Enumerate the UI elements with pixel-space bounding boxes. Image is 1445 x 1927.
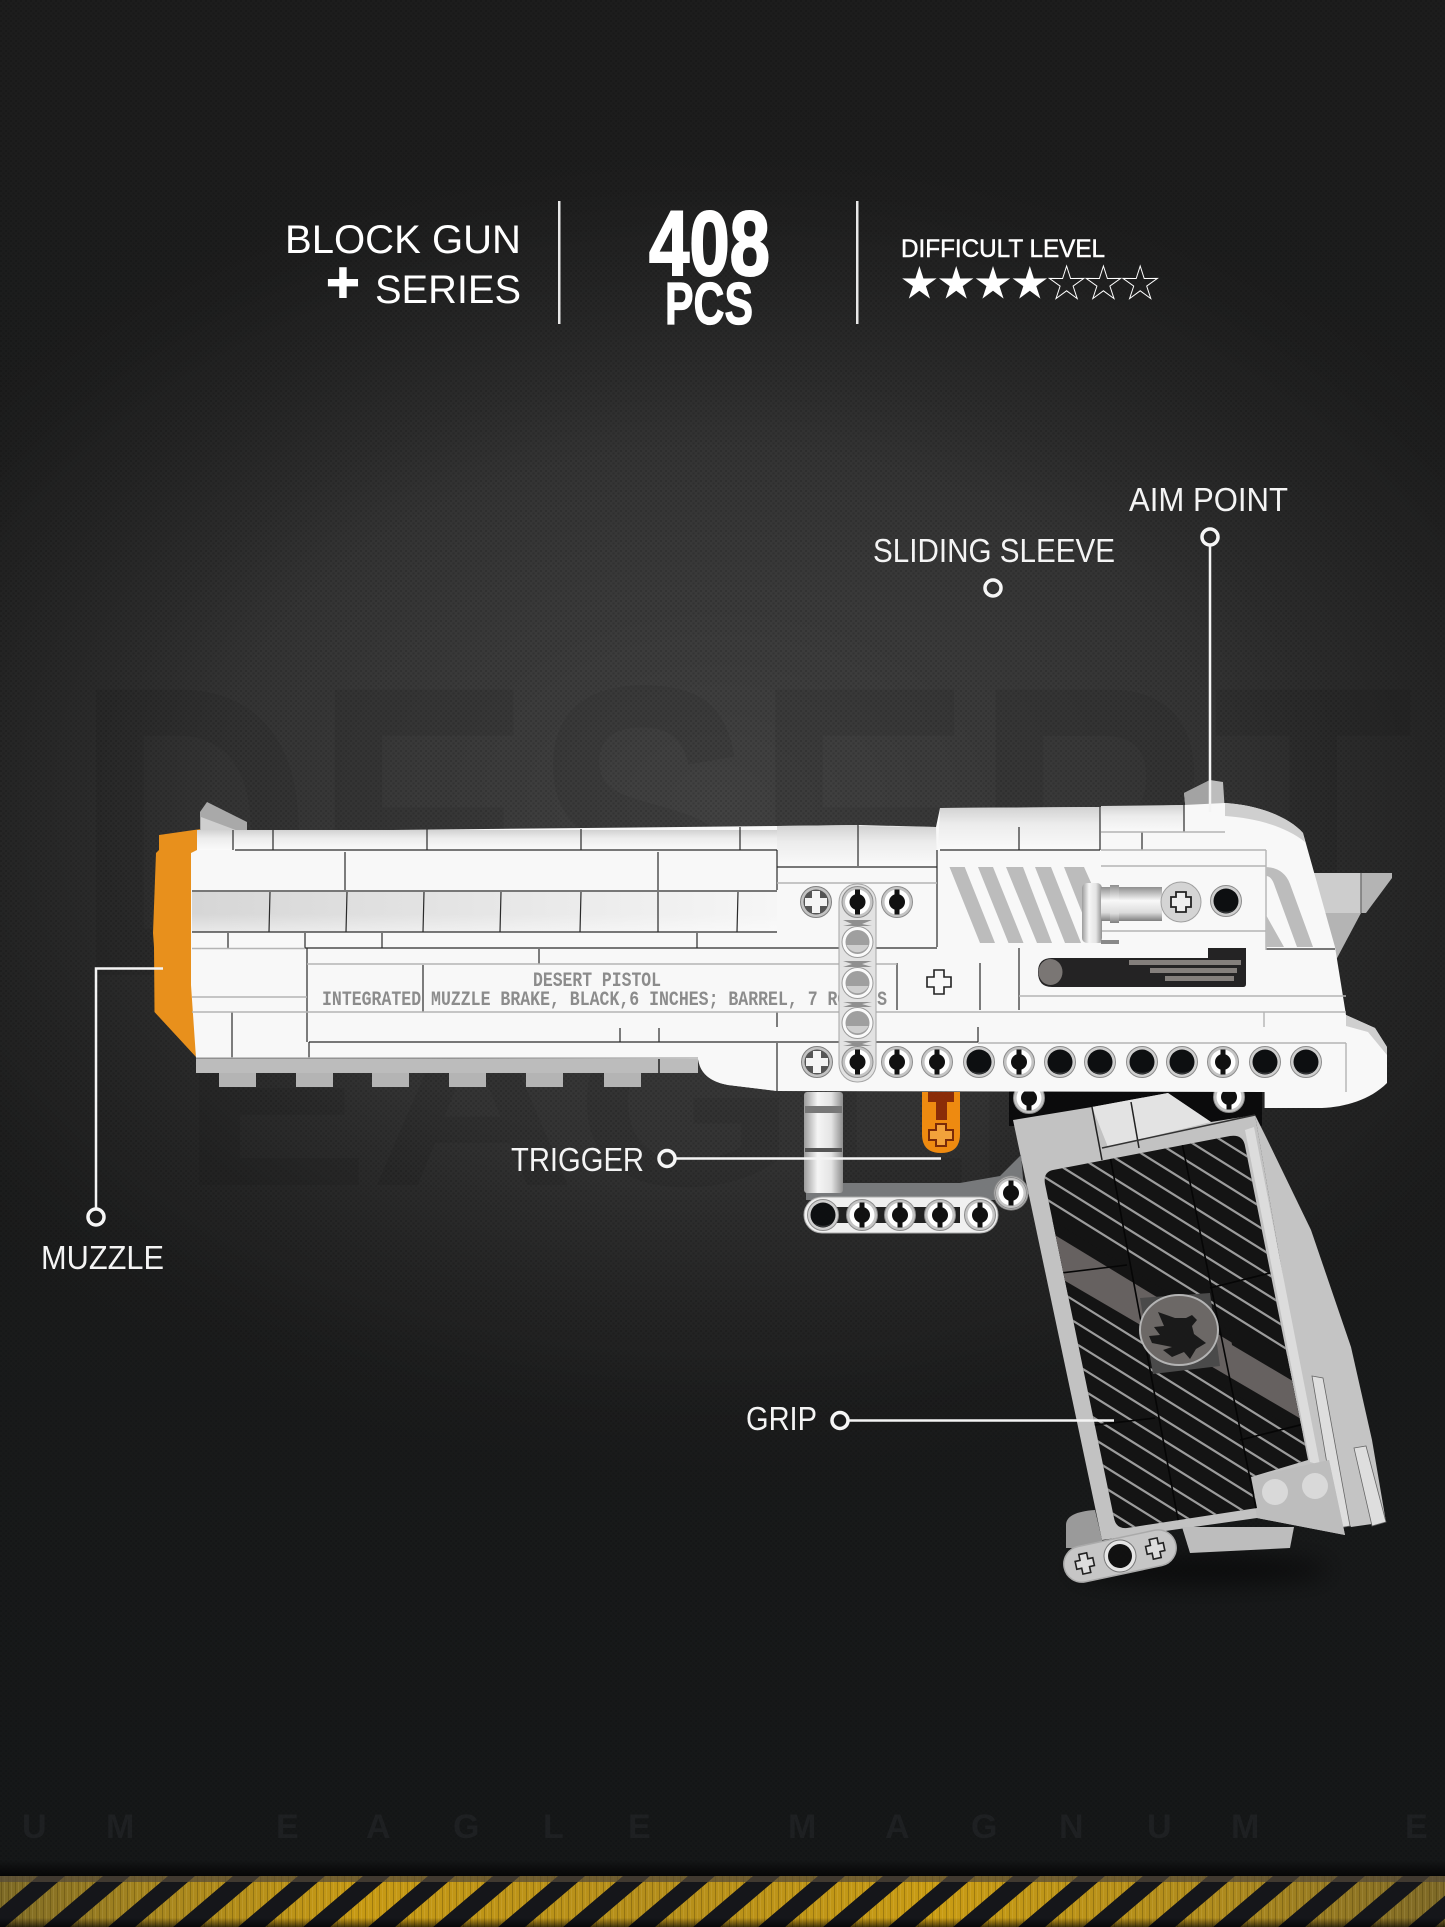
barrel block rows <box>192 892 777 932</box>
star rating <box>902 266 1157 299</box>
slide and frame body <box>191 803 1387 1108</box>
rear sight <box>1184 780 1225 813</box>
diagonal stripes decal <box>950 867 1101 943</box>
frame curve under rail <box>698 1058 777 1091</box>
engraved text: INTEGRATED MUZZLE BRAKE, BLACK,6 INCHES; BARREL, 7 ROUNDS <box>322 989 887 1012</box>
label: sliding sleeve <box>873 532 1115 596</box>
top trim bricks <box>197 803 1387 1055</box>
label: aim point: AIM POINT <box>1129 481 1288 518</box>
dark upper grip connection <box>1009 1090 1262 1126</box>
dark nameplate <box>1038 948 1246 987</box>
piece count <box>649 193 770 337</box>
label: grip: GRIP <box>746 1400 817 1437</box>
divider right <box>856 201 858 324</box>
upper technic holes <box>800 886 1242 918</box>
lower technic holes <box>802 1046 1322 1078</box>
rear stripe decal <box>1266 867 1313 947</box>
front sight <box>200 802 247 832</box>
grey seam lines <box>192 832 1346 1092</box>
eagle emblem <box>1140 1293 1220 1374</box>
grip frame <box>1013 1093 1345 1540</box>
engraved text: DESERT PISTOL <box>533 970 661 993</box>
muzzle: orange <box>153 829 201 1057</box>
piece count: PCS <box>665 271 753 337</box>
grip assembly <box>1009 1092 1386 1583</box>
pistol <box>153 780 1392 1583</box>
label: muzzle: MUZZLE <box>41 1239 164 1276</box>
trigger <box>922 1092 960 1153</box>
series heading <box>285 218 521 315</box>
difficulty level: DIFFICULT LEVEL <box>901 235 1105 263</box>
vertical technic beam <box>839 884 876 1082</box>
dark seam lines <box>192 805 1335 1108</box>
difficulty level <box>901 235 1157 299</box>
grip shadow <box>1070 1556 1330 1584</box>
series heading: + <box>326 250 360 315</box>
ghost watermark: DESERT EAGLE: EAGLE <box>180 968 1160 1236</box>
hazard stripe band <box>0 1860 1445 1927</box>
cross hole <box>927 970 951 994</box>
stud plate <box>1251 1460 1345 1535</box>
grip foot <box>1061 1510 1294 1585</box>
piece count: 408 <box>649 193 770 295</box>
panel seams <box>1063 1145 1301 1520</box>
grip panel with diagonal stripes <box>1044 1136 1308 1528</box>
label: muzzle <box>41 968 164 1276</box>
divider left <box>558 201 560 324</box>
ghost text strip: UMEAGLEMAGNUME <box>22 1808 1428 1846</box>
back strap <box>1255 1115 1386 1527</box>
label: sliding sleeve: SLIDING SLEEVE <box>873 532 1115 569</box>
label: aim point <box>1129 481 1288 812</box>
label: grip <box>746 1400 1114 1437</box>
series heading: BLOCK GUN <box>285 218 521 262</box>
series heading: SERIES <box>375 268 521 312</box>
hammer <box>1300 873 1392 960</box>
slide stop pin <box>1082 882 1201 944</box>
under rail <box>196 1059 698 1073</box>
rail teeth <box>219 1070 641 1087</box>
label: trigger <box>511 1141 941 1178</box>
engraved text <box>322 970 887 1012</box>
label: trigger: TRIGGER <box>511 1141 644 1178</box>
trigger guard <box>804 1092 1028 1233</box>
rear plates <box>1312 1376 1386 1528</box>
